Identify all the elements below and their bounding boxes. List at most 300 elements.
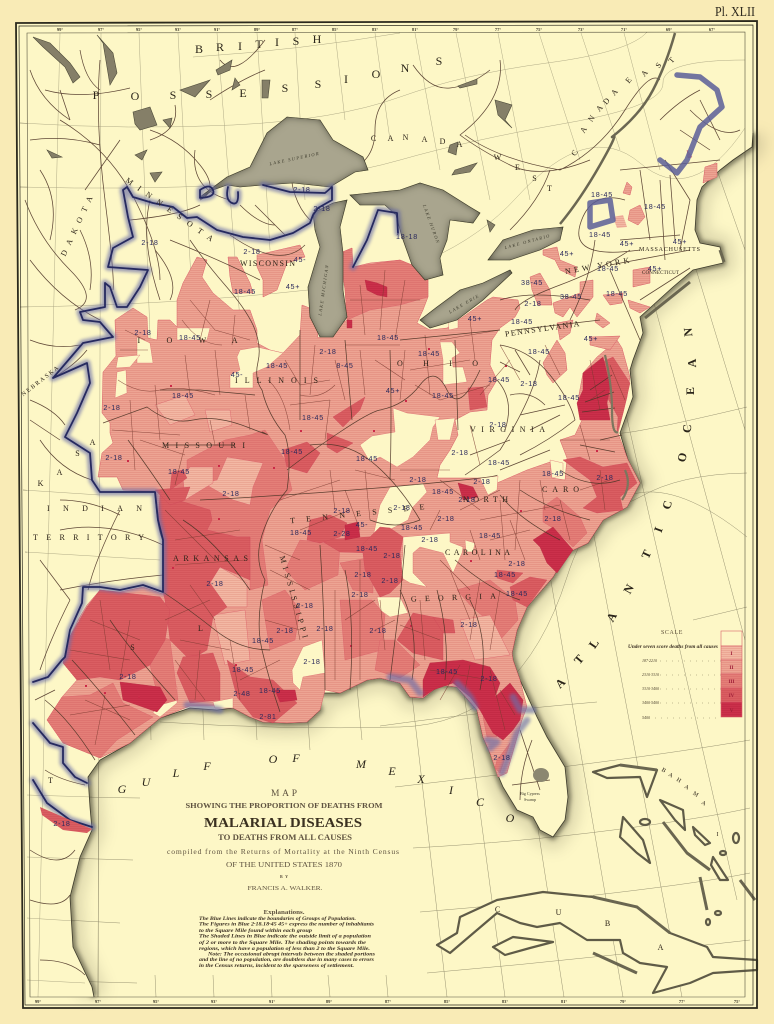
population density figures: 2-81	[259, 712, 277, 721]
label: Canada West and Canada East: A	[578, 121, 591, 135]
population density figures: 18-45	[418, 349, 440, 358]
label: Canada West and Canada East: C	[371, 134, 381, 143]
population density figures: 2-18	[383, 551, 401, 560]
population density figures: 2-18	[53, 819, 71, 828]
population density figures: 2-18	[276, 626, 294, 635]
population density figures: 2-18	[493, 753, 511, 762]
label: Gulf of Mexico: C	[476, 795, 485, 809]
label: British Possessions: I	[344, 72, 348, 86]
explanations text block: regions, which have a population of less than 2 to the Square Mile.	[199, 946, 370, 952]
label: Canada West and Canada East: D	[601, 92, 615, 106]
longitude labels top: 67°	[709, 27, 715, 32]
legend row labels: 187·2210	[642, 658, 657, 663]
legend row labels: 2310·3310	[642, 672, 659, 677]
population density figures: 2-18	[520, 379, 538, 388]
label: Bahama and Cuba names: I	[716, 832, 724, 838]
label: Bahama and Cuba names: A	[658, 943, 668, 952]
region: medium shading	[47, 248, 587, 773]
region: lowest shading base	[47, 248, 640, 777]
title block: FRANCIS A. WALKER.	[248, 885, 323, 892]
population density figures: 18-45	[591, 190, 613, 199]
label: states and territories: ARKANSAS	[173, 554, 253, 563]
lakes	[200, 117, 563, 337]
population density figures: 2-18	[480, 674, 498, 683]
label: Bahama and Cuba names: M	[692, 791, 703, 801]
population density figures: 18-45	[401, 523, 423, 532]
Florida interior lake and cypress swamp: Swamp	[524, 797, 536, 802]
longitude labels bottom: 81°	[561, 999, 567, 1004]
label: states and territories: TERRITORY	[33, 533, 149, 542]
population density figures: 2-18	[596, 473, 614, 482]
county lines in shaded area	[70, 270, 625, 745]
longitude labels top: 93°	[175, 27, 181, 32]
population density figures: 18-45	[356, 454, 378, 463]
label: lake names	[268, 151, 551, 317]
label: Canada West and Canada East: T	[666, 52, 680, 65]
Bahama ridges	[593, 765, 755, 973]
longitude labels top: 71°	[621, 27, 627, 32]
population density figures: 18-45	[432, 391, 454, 400]
population density figures: 18-45	[302, 413, 324, 422]
label: Gulf of Mexico: O	[506, 811, 515, 825]
label: British Possessions: O	[131, 89, 140, 103]
label: Bahama and Cuba names: A	[667, 772, 678, 782]
population density figures: 2-18	[544, 514, 562, 523]
legend numerals: II	[730, 666, 733, 671]
population density figures: 2-48	[233, 689, 251, 698]
population density figures: 2-18	[333, 506, 351, 515]
label: states and territories: PENNSYLVANIA	[504, 319, 585, 339]
label: Bahama and Cuba names: B	[605, 919, 615, 928]
label: states and territories: NEBRASKA	[21, 362, 64, 398]
longitude labels bottom: 93°	[211, 999, 217, 1004]
longitude labels top: 95°	[136, 27, 142, 32]
title block: TO DEATHS FROM ALL CAUSES	[218, 833, 353, 842]
label: Canada West and Canada East: A	[639, 64, 653, 78]
label: Canada West and Canada East: T	[547, 184, 557, 193]
title block: compiled from the Returns of Mortality at the Ninth Census	[167, 847, 399, 856]
region: darkest shading	[120, 280, 610, 740]
explanations text block	[199, 910, 375, 969]
longitude labels top: 85°	[332, 27, 338, 32]
population density figures: 45+	[648, 264, 662, 273]
longitude labels top: 83°	[372, 27, 378, 32]
longitude labels top: 75°	[536, 27, 542, 32]
label: Canada West and Canada East	[371, 52, 680, 193]
label: Gulf of Mexico: G	[118, 782, 127, 796]
population density figures: 18-45	[259, 686, 281, 695]
population density figures: 18-18	[396, 232, 418, 241]
population density figures: 18-45	[232, 665, 254, 674]
label: lake names: LAKE SUPERIOR	[268, 151, 320, 167]
explanations text block: The Figures in Blue 2·18.18·45 45+ express the number of inhabitants	[199, 922, 374, 928]
St Lawrence River	[560, 33, 675, 224]
label: states and territories: CARO	[542, 485, 584, 494]
label: Canada West and Canada East: N	[403, 133, 413, 142]
population density figures: 2-18	[206, 579, 224, 588]
label: Atlantic Ocean: A	[552, 675, 568, 691]
population density figures: 2-18	[369, 626, 387, 635]
label: British Possessions: E	[239, 86, 247, 100]
longitude labels bottom	[35, 999, 740, 1004]
population density figures: 18-45	[589, 230, 611, 239]
population density figures: 2-18	[458, 495, 476, 504]
panel: malarial death shading	[47, 150, 717, 777]
population density figures: 2-18	[105, 453, 123, 462]
population density figures: 2-18	[508, 559, 526, 568]
region: dark shading	[63, 357, 637, 723]
label: Atlantic Ocean: N	[681, 327, 695, 337]
explanations text block: Explanations.	[264, 910, 305, 916]
population density figures: 45+	[468, 314, 482, 323]
population density figures: 2-18	[296, 601, 314, 610]
label: Atlantic Ocean: E	[683, 387, 697, 395]
label: states and territories: MISSISSIPPI	[278, 555, 311, 644]
legend numerals: I	[731, 652, 733, 657]
explanations text block: to the Square Mile found within each group	[199, 928, 312, 934]
population density figures: 2-18	[243, 247, 261, 256]
label: states and territories: CONNECTICUT	[642, 271, 680, 276]
population density figures: 2-18	[103, 403, 121, 412]
population density figures: 45-	[294, 255, 306, 264]
population density figures: 18-45	[281, 447, 303, 456]
longitude labels bottom: 91°	[269, 999, 275, 1004]
coast shading	[70, 133, 753, 997]
longitude labels bottom: 77°	[679, 999, 685, 1004]
population density figures: 18-45	[234, 287, 256, 296]
population density figures: 2-18	[460, 620, 478, 629]
label: British Possessions: P	[93, 88, 100, 102]
title block: MAP	[271, 789, 297, 799]
population density figures: 18-45	[558, 393, 580, 402]
longitude labels top	[57, 27, 715, 32]
population density figures: 45-	[231, 370, 243, 379]
longitude labels bottom: 85°	[444, 999, 450, 1004]
label: states and territories: L	[198, 624, 208, 633]
label: Canada West and Canada East: A	[388, 134, 398, 143]
explanations text block: and the line of no population, are doubtless due in many cases to errors	[199, 957, 374, 963]
longitude labels bottom: 99°	[35, 999, 41, 1004]
label: Atlantic Ocean: T	[571, 652, 587, 667]
explanations text block: The Shaded Lines in Blue indicate the outside limit of a population	[199, 934, 371, 940]
northern lakes	[33, 35, 512, 232]
population density figures: 2-18	[354, 570, 372, 579]
label: Atlantic Ocean: I	[651, 525, 666, 534]
population density figures: 2-18	[319, 347, 337, 356]
label: Atlantic Ocean	[552, 327, 699, 691]
label: states and territories: MASSACHUSETTS	[639, 247, 701, 253]
population density figures: 2-18	[381, 576, 399, 585]
label: Bahama and Cuba names: A	[700, 800, 711, 810]
label: British Possessions: S	[315, 77, 321, 91]
label: states and territories: NORTH	[463, 495, 513, 504]
label: states and territories: VIRGINIA	[470, 425, 550, 434]
label: lake names: LAKE ERIE	[447, 293, 480, 315]
title block: SHOWING THE PROPORTION OF DEATHS FROM	[186, 802, 383, 810]
label: states and territories: INDIAN	[47, 504, 147, 513]
longitude labels top: 73°	[578, 27, 584, 32]
label: states and territories: A	[57, 468, 67, 477]
label: Canada West and Canada East: C	[569, 144, 582, 157]
population density figures: 18-45	[606, 289, 628, 298]
label: Gulf of Mexico: O	[269, 752, 278, 766]
population density figures: 18-45	[377, 333, 399, 342]
population density figures: 45-	[356, 520, 368, 529]
label: Atlantic Ocean: O	[674, 451, 690, 463]
population density figures: 2-18	[451, 448, 469, 457]
label: states and territories: NEW YORK	[564, 255, 635, 276]
longitude labels top: 99°	[57, 27, 63, 32]
region: small Texas coast strip	[40, 807, 92, 833]
explanations text block: of 2 or more to the Square Mile. The shading points towards the	[199, 940, 367, 946]
explanations text block: in the Census returns, incident to the sparseness of settlement.	[199, 963, 354, 969]
title block: MALARIAL DISEASES	[204, 816, 362, 831]
label: Bahama and Cuba names	[495, 767, 724, 952]
label: Canada West and Canada East: A	[609, 83, 623, 97]
coastline	[70, 133, 753, 997]
population density figures: 2-18	[293, 185, 311, 194]
population density figures: 8-45	[336, 361, 354, 370]
label: Atlantic Ocean: L	[586, 636, 602, 651]
longitude labels bottom: 83°	[502, 999, 508, 1004]
longitude labels top: 79°	[453, 27, 459, 32]
longitude labels bottom: 87°	[385, 999, 391, 1004]
label: British Possessions: B	[195, 42, 203, 56]
label: British Possessions: R	[216, 40, 224, 54]
population density figures: 2-18	[316, 624, 334, 633]
label: British Possessions: S	[282, 81, 288, 95]
longitude labels top: 91°	[214, 27, 220, 32]
label: Bahama and Cuba names: A	[683, 784, 694, 794]
longitude labels top: 69°	[666, 27, 672, 32]
population density figures: 45+	[386, 386, 400, 395]
Chesapeake and Pamlico bays, Long Island	[605, 250, 724, 500]
label: states and territories	[21, 176, 701, 785]
population density figures: 2-18	[393, 503, 411, 512]
label: Canada West and Canada East: W	[494, 153, 506, 162]
population density figures: 18-45	[506, 589, 528, 598]
label: Atlantic Ocean: A	[603, 609, 620, 624]
population density figures: 2-18	[222, 489, 240, 498]
unshaded cream gaps	[73, 316, 563, 717]
population density figures: 45+	[584, 334, 598, 343]
population density figures: 2-18	[141, 238, 159, 247]
Florida interior lake and cypress swamp: Big Cypress	[520, 791, 540, 796]
population density figures: 45+	[673, 237, 687, 246]
longitude labels top: 97°	[98, 27, 104, 32]
longitude labels top: 89°	[254, 27, 260, 32]
population density figures: 18-45	[172, 391, 194, 400]
population density figures: 18-45	[511, 317, 533, 326]
label: Gulf of Mexico: I	[448, 783, 454, 797]
label: Canada West and Canada East: A	[422, 135, 432, 144]
legend heading: SCALE	[661, 630, 683, 636]
label: Canada West and Canada East: S	[532, 174, 542, 183]
label: British Possessions: T	[255, 37, 263, 51]
label: states and territories: ILLINOIS	[235, 376, 323, 385]
population density figures: 2-18	[524, 299, 542, 308]
label: Gulf of Mexico: M	[355, 757, 367, 771]
population density figures: 38-45	[560, 292, 582, 301]
explanations text block: The Blue Lines indicate the boundaries of Groups of Population.	[199, 916, 356, 922]
region: pale cuts inside medium shading	[155, 395, 510, 665]
population density figures: 2-28	[333, 529, 351, 538]
frontier line	[33, 185, 398, 827]
label: Canada West and Canada East: S	[654, 57, 667, 70]
region: pale patch	[613, 215, 627, 228]
label: states and territories: A	[90, 438, 100, 447]
population density figures: 2-18	[351, 590, 369, 599]
population density figures: 2-18	[409, 475, 427, 484]
population density figures: 2-18	[303, 657, 321, 666]
longitude labels bottom: 79°	[620, 999, 626, 1004]
label: British Possessions: H	[313, 32, 322, 46]
label: Canada West and Canada East: N	[586, 110, 600, 124]
boundary blue lines	[33, 75, 722, 827]
legend leader lines	[655, 661, 721, 718]
legend row labels	[642, 658, 659, 720]
label: states and territories: OHIO	[397, 359, 483, 368]
northeast population lines	[590, 75, 722, 227]
population density figures: 2-18	[421, 535, 439, 544]
label: British Possessions: S	[170, 88, 176, 102]
label: British Possessions: O	[372, 67, 381, 81]
legend numerals: III	[729, 680, 734, 685]
label: British Possessions: N	[401, 61, 410, 75]
label: Canada West and Canada East: E	[515, 163, 525, 172]
longitude labels bottom: 75°	[734, 999, 740, 1004]
population density figures: 2-18	[473, 477, 491, 486]
explanations text block: Note: The occasional abrupt intervals between the shaded portions	[207, 952, 375, 958]
label: British Possessions	[93, 32, 442, 103]
longitude labels top: 77°	[495, 27, 501, 32]
label: states and territories: TENNESSEE	[290, 502, 430, 525]
population density figures: 18-45	[436, 667, 458, 676]
label: lake names: LAKE MICHIGAN	[317, 264, 330, 317]
label: Bahama and Cuba names: U	[556, 908, 566, 917]
population density figures: 18-45	[179, 333, 201, 342]
label: Atlantic Ocean: N	[620, 581, 637, 596]
population density figures: 18-45	[542, 469, 564, 478]
population density figures: 45+	[560, 249, 574, 258]
label: Gulf of Mexico	[118, 751, 515, 825]
population density figures: 18-45	[252, 636, 274, 645]
longitude labels bottom: 97°	[95, 999, 101, 1004]
label: states and territories: IOWA	[138, 336, 242, 345]
label: Bahama and Cuba names: H	[675, 777, 686, 787]
label: British Possessions: S	[206, 87, 212, 101]
population density figures: 18-45	[597, 264, 619, 273]
population density figures: 18-45	[432, 487, 454, 496]
label: British Possessions: I	[275, 35, 279, 49]
label: British Possessions: S	[436, 54, 442, 68]
label: Gulf of Mexico: F	[202, 759, 211, 773]
label: Atlantic Ocean: A	[685, 358, 699, 368]
legend numerals: IV	[729, 694, 735, 699]
longitude labels top: 87°	[292, 27, 298, 32]
label: Gulf of Mexico: X	[416, 772, 425, 786]
population density figures: 38-45	[521, 278, 543, 287]
label: states and territories: MINNESOTA	[124, 176, 219, 246]
frontier glow	[33, 185, 533, 827]
islands: Cuba and the Bahamas	[437, 765, 757, 993]
plate number: Pl. XLII	[715, 4, 755, 19]
population density figures: 18-45	[488, 458, 510, 467]
population density figures: 45+	[286, 282, 300, 291]
population density figures: 18-45	[528, 347, 550, 356]
population density figures: 18-45	[488, 375, 510, 384]
label: Gulf of Mexico: F	[291, 751, 300, 765]
population density figures: 45+	[620, 239, 634, 248]
legend caption: Under seven score deaths from all causes	[628, 644, 718, 650]
title block: BY	[280, 874, 288, 879]
label: Canada West and Canada East: D	[440, 137, 450, 146]
label: Bahama and Cuba names: B	[660, 767, 671, 777]
label: states and territories: K	[38, 479, 48, 488]
region: northern isolated patches	[228, 150, 717, 383]
label: Gulf of Mexico: U	[142, 775, 152, 789]
legend numerals	[729, 652, 735, 714]
label: British Possessions: S	[293, 34, 299, 48]
legend row labels: 3400·5400	[642, 700, 659, 705]
legend: scale	[628, 630, 742, 720]
label: Atlantic Ocean: T	[638, 548, 654, 561]
label: states and territories: S	[130, 643, 140, 652]
label: British Possessions: I	[238, 39, 242, 53]
label: states and territories: CAROLINA	[445, 548, 515, 557]
longitude labels bottom: 89°	[326, 999, 332, 1004]
label: Bahama and Cuba names: C	[495, 905, 505, 914]
population density figures: 18-45	[290, 528, 312, 537]
longitude labels top: 81°	[412, 27, 418, 32]
population density figures: 2-18	[134, 328, 152, 337]
population density figures: 2-18	[313, 204, 331, 213]
population density figures: 2-18	[437, 514, 455, 523]
county marks	[85, 348, 598, 698]
label: states and territories: WISCONSIN	[240, 259, 300, 268]
label: lake names: LAKE HURON	[422, 203, 441, 245]
population density figures: 18-45	[494, 570, 516, 579]
label: Atlantic Ocean: C	[659, 499, 675, 511]
label: Canada West and Canada East: A	[457, 140, 467, 149]
Florida interior lake and cypress swamp	[520, 768, 549, 802]
population density figures: 18-45	[356, 544, 378, 553]
title block: OF THE UNITED STATES 1870	[226, 860, 342, 869]
label: states and territories: S	[75, 449, 85, 458]
population density figures: 18-45	[479, 531, 501, 540]
population density figures	[53, 185, 687, 828]
population density figures: 2-18	[489, 420, 507, 429]
legend numerals: V	[730, 709, 734, 714]
label: Gulf of Mexico: E	[387, 764, 396, 778]
population density figures: 2-18	[119, 672, 137, 681]
legend row labels: 3310·3400	[642, 686, 659, 691]
label: Gulf of Mexico: L	[172, 766, 180, 780]
label: states and territories: MISSOURI	[162, 441, 250, 450]
title block	[167, 789, 399, 892]
label: states and territories: GEORGIA	[411, 591, 501, 604]
population density figures: 18-45	[266, 361, 288, 370]
label: Canada West and Canada East: A	[594, 99, 608, 113]
legend swatches	[721, 631, 742, 717]
label: states and territories: T	[48, 776, 58, 785]
label: Atlantic Ocean: C	[680, 424, 694, 434]
label: Canada West and Canada East: E	[623, 72, 637, 85]
population density figures: 18-45	[168, 467, 190, 476]
label: lake names: LAKE ONTARIO	[503, 233, 551, 250]
population density figures: 18-45	[644, 202, 666, 211]
legend row labels: 5400	[642, 715, 650, 720]
